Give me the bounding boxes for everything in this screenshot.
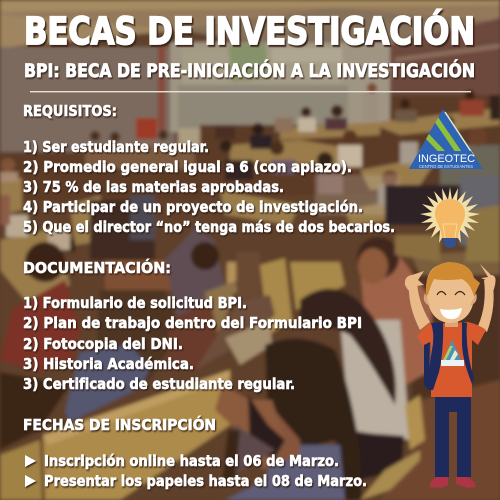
logo: INGEOTEC: CENTRO DE ESTUDIANTES	[419, 164, 473, 169]
blue sleeved student	[65, 345, 150, 422]
logo: INGEOTEC	[409, 109, 483, 169]
mid desk and students	[95, 290, 275, 380]
ceiling	[0, 0, 500, 48]
heading: requisitos: REQUISITOS:	[23, 102, 117, 120]
list: requisitos: 3) 75 % de las materias aprobadas.	[23, 178, 284, 196]
heading: fechas de inscripción: FECHAS DE INSCRIPCIÓN	[23, 415, 216, 434]
big tan desk	[0, 370, 230, 500]
background behind the figure	[412, 270, 500, 400]
shirt logo	[441, 340, 464, 366]
hair	[426, 262, 480, 296]
list: requisitos: 4) Participar de un proyecto de investigación.	[23, 198, 363, 216]
icon: light bulb	[420, 187, 480, 248]
list: documentación	[23, 294, 362, 393]
red box	[136, 118, 157, 139]
list: fechas: Presentar los papeles hasta el 08 de Marzo.	[44, 472, 367, 490]
seat backs and floor right	[360, 205, 500, 500]
backpack straps	[424, 322, 474, 390]
shoes	[429, 477, 476, 488]
front student with ponytail	[215, 339, 362, 500]
long-hair student white top	[300, 289, 410, 480]
ears	[424, 293, 477, 306]
list: requisitos: 5) Que el director “no” tenga más de dos becarios.	[23, 218, 395, 236]
neck	[445, 318, 458, 327]
shirt	[417, 322, 486, 397]
hands	[405, 264, 496, 292]
list: requisitos: 1) Ser estudiante regular.	[23, 138, 209, 156]
list: requisitos: 2) Promedio general igual a 6 (con aplazo).	[23, 158, 352, 176]
eyes	[437, 292, 465, 295]
arms	[409, 279, 494, 332]
brick wall	[390, 18, 500, 110]
students rows back	[0, 95, 500, 200]
list: documentación: 1) Formulario de solicitud BPI.	[23, 294, 247, 312]
bench center tan	[205, 252, 345, 345]
smile	[440, 308, 462, 319]
character: smiling student	[405, 262, 496, 488]
list: documentación: 2) Plan de trabajo dentro del Formulario BPI	[23, 314, 362, 332]
right man	[357, 237, 432, 385]
list: fechas	[25, 452, 367, 490]
wall left	[0, 47, 175, 157]
head	[426, 264, 475, 323]
list: documentación: 2) Fotocopia del DNI.	[23, 335, 183, 353]
legs	[435, 395, 471, 477]
back row heads and shirts	[215, 83, 500, 245]
list: documentación: 3) Historia Académica.	[23, 355, 194, 373]
red column	[158, 45, 165, 130]
tan benches back	[0, 108, 500, 300]
projection screen	[170, 42, 395, 150]
logo: INGEOTEC: INGEOTEC	[418, 153, 475, 165]
list: fechas: Inscripción online hasta el 06 de Marzo.	[44, 452, 339, 470]
left rows of students	[0, 130, 226, 330]
heading: documentación: DOCUMENTACIÓN:	[23, 258, 171, 277]
list: requisitos	[23, 138, 395, 236]
lower left shadow	[0, 372, 70, 450]
tartan student	[0, 242, 80, 372]
list: documentación: 3) Certificado de estudiante regular.	[23, 375, 295, 393]
